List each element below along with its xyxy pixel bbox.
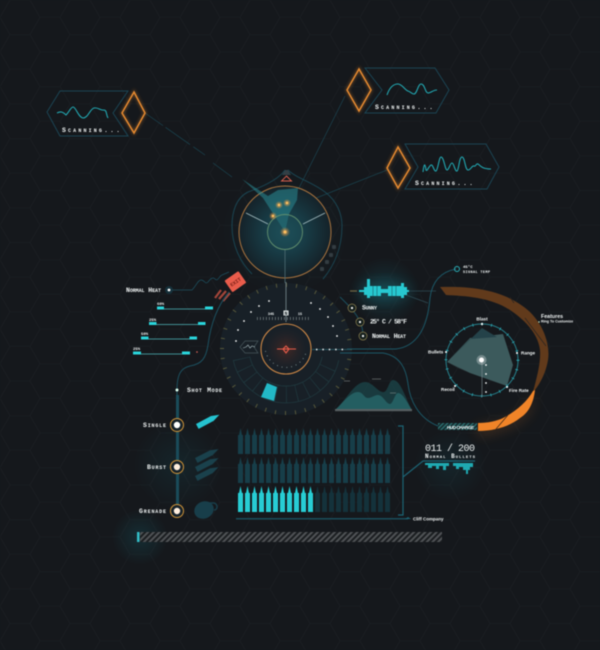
stat radar chart	[428, 316, 535, 397]
radar top triangle marker	[282, 170, 292, 181]
mini wave tag	[240, 341, 258, 353]
icon: grenade	[191, 498, 217, 522]
connector lines to right radar	[340, 269, 456, 426]
row 1 bullets	[238, 428, 390, 454]
heading ruler: N	[284, 311, 288, 317]
gauge segment cells	[233, 357, 339, 403]
signal temp readout	[454, 265, 490, 275]
radar side indicators	[320, 245, 336, 271]
heat level bars: 50%	[141, 333, 149, 337]
stat radar chart: Range	[521, 350, 535, 356]
features label	[538, 314, 573, 324]
radar blue contour	[232, 170, 342, 279]
right dotted readout line	[312, 348, 350, 350]
signal temp readout: 45°C	[463, 265, 473, 270]
icon: single bullet	[196, 412, 221, 429]
red warning tag: EXIT	[229, 277, 243, 288]
scanner panel: top right: Scanning...	[375, 104, 433, 111]
gauge white dots	[235, 300, 338, 342]
center dial with aircraft	[261, 324, 311, 374]
normal heat label and wiggle link: Normal Heat	[126, 287, 161, 294]
stat radar chart: Recoil	[441, 387, 455, 392]
ammo grid	[236, 428, 408, 520]
hud charge label	[438, 423, 477, 430]
row 2 bullets	[238, 457, 390, 483]
ammo count readout: 011 / 200	[425, 443, 475, 455]
radar sweep cone	[242, 179, 298, 232]
active cell	[261, 383, 277, 401]
weather readouts: Normal Heat	[372, 333, 406, 340]
normal heat label and wiggle link	[126, 272, 229, 294]
curved connector to shot mode	[177, 292, 229, 390]
connector lines from scanners to radar	[145, 96, 387, 206]
shot mode selector: Shot Mode	[187, 387, 222, 394]
heat level bars: 60%	[157, 303, 165, 307]
charge arc: dim section	[440, 287, 548, 392]
charge arc: bright section	[478, 390, 535, 435]
grenade mode: Grenade	[139, 508, 166, 515]
hud charge label: HUD CHARGE	[447, 425, 474, 430]
audio waveform	[350, 279, 436, 303]
area chart	[335, 379, 412, 411]
ammo histogram	[425, 463, 473, 474]
row 3 spent bullets	[315, 486, 390, 512]
row 3 active bullets	[238, 486, 313, 512]
ambient glows	[112, 167, 486, 565]
ammo count readout	[425, 443, 476, 474]
main radar	[239, 179, 331, 290]
single mode: Single	[143, 422, 166, 429]
scanner panel: middle right	[387, 144, 499, 189]
red warning tag	[215, 271, 246, 301]
icon: burst bullets	[195, 447, 220, 481]
heat level bars: 25%	[149, 319, 157, 323]
ammo count readout: Normal Bullets	[425, 453, 476, 460]
features label: Features	[541, 314, 563, 320]
scanner panel: left	[47, 91, 145, 136]
stat radar chart: Blast	[476, 316, 488, 322]
features label: Ring To Customize	[541, 320, 573, 324]
heat level bars: 25%	[133, 348, 141, 352]
shot mode selector	[139, 387, 222, 518]
ammo bracket and link	[398, 426, 475, 515]
heading ruler: 345	[268, 313, 274, 317]
company label: Cliff Company	[413, 516, 444, 522]
weather readouts: Sunny	[362, 304, 377, 312]
targeting gauge	[220, 282, 352, 415]
stat radar chart: Fire Rate	[509, 388, 529, 393]
striped progress bar	[137, 532, 442, 542]
scanner panel: middle right: Scanning...	[415, 180, 473, 187]
heading ruler	[257, 282, 311, 322]
weather readouts	[340, 297, 407, 340]
gauge tick ring	[222, 285, 350, 413]
heading ruler: 15	[298, 313, 302, 317]
signal temp readout: SIGNAL TEMP	[463, 271, 490, 275]
stat radar chart: Bullets	[428, 350, 444, 354]
burst mode: Burst	[147, 464, 166, 471]
scanner panel: left: Scanning...	[62, 127, 120, 134]
scanner panel: top right	[347, 68, 449, 113]
weather readouts: 25° C / 58°F	[370, 318, 407, 326]
heat level bars	[133, 303, 213, 354]
